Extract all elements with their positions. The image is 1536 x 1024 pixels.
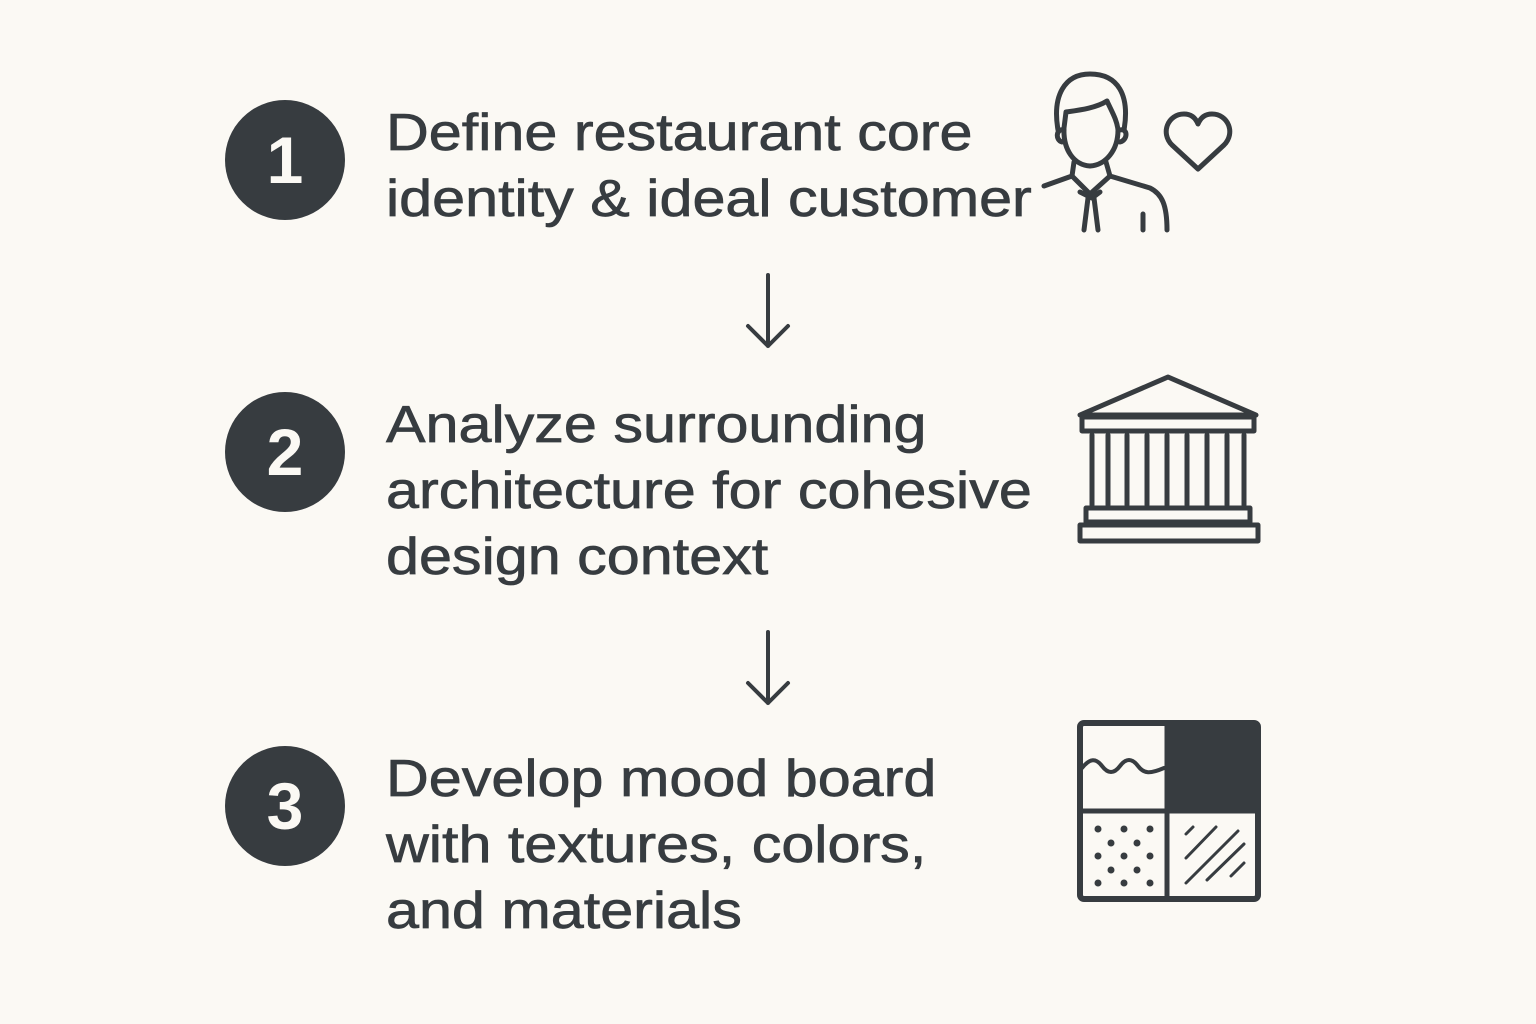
step 3 number: [225, 746, 345, 866]
arrow 1: [748, 275, 788, 346]
step 3 text: with textures, colors,: [386, 816, 926, 874]
step 2 number: 2: [267, 415, 303, 489]
step 1 text: [386, 104, 1032, 228]
step 3 number: 3: [267, 769, 303, 843]
step 3 text: [385, 750, 936, 940]
icon: person: [1044, 74, 1167, 230]
icon: mood board: [1080, 723, 1258, 899]
step 1 number: 1: [267, 123, 303, 197]
step 2 text: Analyze surrounding: [386, 396, 926, 454]
step 2 text: [386, 396, 1032, 586]
arrow 2: [748, 632, 788, 703]
step 2 text: architecture for cohesive: [386, 462, 1032, 520]
step 1 text: identity & ideal customer: [386, 170, 1032, 228]
icon: classical building: [1080, 377, 1258, 541]
step 2 text: design context: [386, 528, 768, 586]
icon: heart: [1166, 114, 1230, 169]
step 3 text: Develop mood board: [386, 750, 936, 808]
step 1 text: Define restaurant core: [386, 104, 973, 162]
step 2 number: [225, 392, 345, 512]
step 3 text: and materials: [386, 882, 742, 940]
step 1 number: [225, 100, 345, 220]
